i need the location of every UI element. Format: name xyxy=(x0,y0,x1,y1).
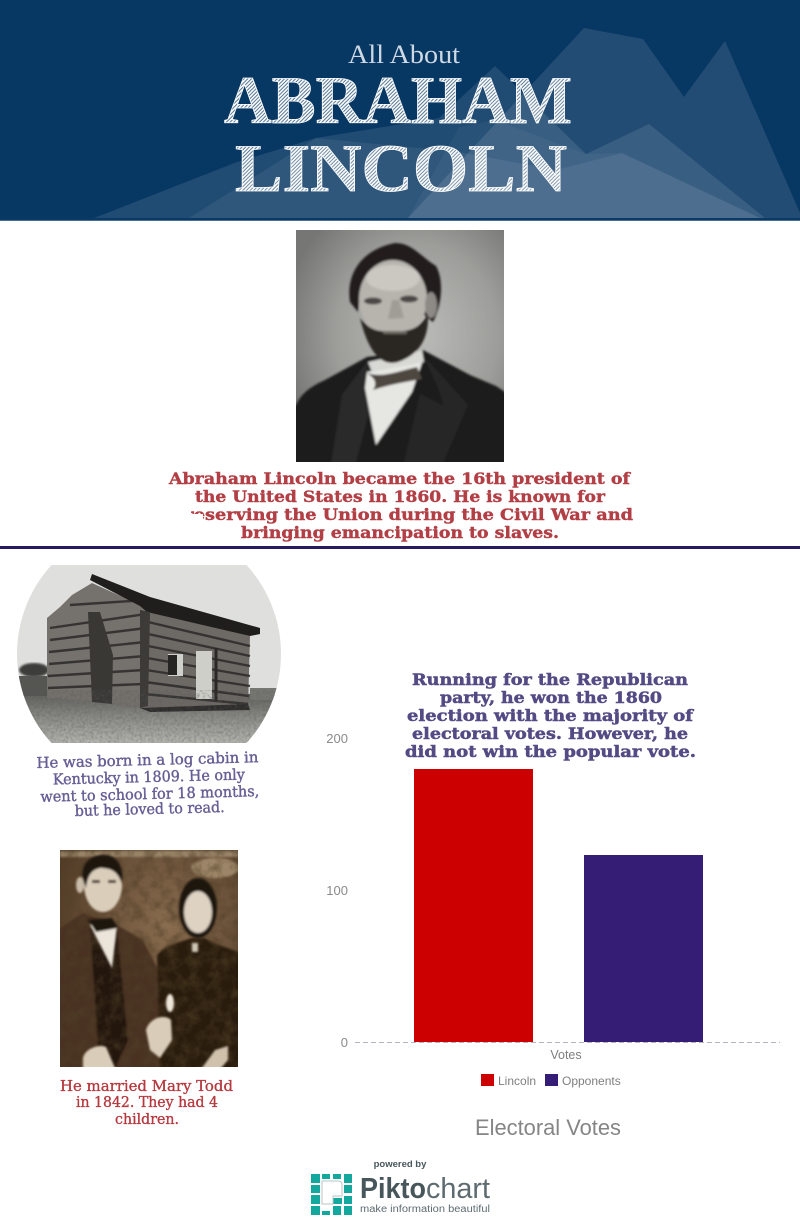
intro text: the United States in 1860. He is known for xyxy=(195,487,606,506)
election text: Running for the Republican xyxy=(412,670,688,689)
marriage caption: children. xyxy=(115,1110,179,1128)
y axis labels: 0 xyxy=(341,1035,348,1050)
bar: Opponents xyxy=(584,855,703,1042)
election text: electoral votes. However, he xyxy=(412,724,688,743)
election text: did not win the popular vote. xyxy=(405,742,696,761)
intro text: bringing emancipation to slaves. xyxy=(241,523,559,542)
title: Abraham: ABRAHAM xyxy=(224,62,572,138)
Piktochart footer logo xyxy=(311,1159,490,1215)
mountains background xyxy=(89,28,800,220)
legend xyxy=(481,1074,621,1088)
cabin caption: Kentucky in 1809. He only xyxy=(53,765,246,789)
tagline: make information beautiful xyxy=(360,1204,490,1215)
photo: log cabin xyxy=(17,565,281,743)
chart title: Electoral Votes xyxy=(475,1115,621,1140)
cabin caption xyxy=(36,748,260,821)
header banner xyxy=(0,0,800,221)
election text: party, he won the 1860 xyxy=(440,688,662,707)
election text xyxy=(405,670,696,761)
y axis labels: 100 xyxy=(326,883,348,898)
legend: Lincoln xyxy=(498,1074,536,1088)
title: All About: All About xyxy=(348,40,461,69)
y axis labels xyxy=(326,731,348,1050)
marriage caption xyxy=(60,1077,233,1128)
cabin caption: He was born in a log cabin in xyxy=(36,748,259,772)
x axis label: Votes xyxy=(550,1048,582,1062)
Piktochart footer logo: chart xyxy=(426,1173,490,1205)
legend: Opponents xyxy=(562,1074,621,1088)
y axis labels: 200 xyxy=(326,731,348,746)
Piktochart footer logo: powered by xyxy=(374,1159,427,1170)
intro text: preserving the Union during the Civil War and xyxy=(172,505,633,524)
logo mark xyxy=(311,1174,352,1215)
title: Lincoln: LINCOLN xyxy=(235,130,567,206)
bar chart: electoral votes xyxy=(326,731,780,1140)
intro text xyxy=(168,469,633,542)
intro text: Abraham Lincoln became the 16th president of xyxy=(168,469,631,488)
cabin caption: but he loved to read. xyxy=(74,798,225,820)
marriage caption: in 1842. They had 4 xyxy=(76,1093,218,1111)
bar: Lincoln xyxy=(414,769,533,1042)
election text: election with the majority of xyxy=(407,706,694,725)
marriage caption: He married Mary Todd xyxy=(60,1077,233,1095)
cabin caption: went to school for 18 months, xyxy=(40,782,259,806)
photo: Lincoln portrait xyxy=(296,230,504,462)
wordmark: Pikto xyxy=(360,1173,426,1205)
photo: Lincoln and Mary Todd xyxy=(60,850,238,1067)
